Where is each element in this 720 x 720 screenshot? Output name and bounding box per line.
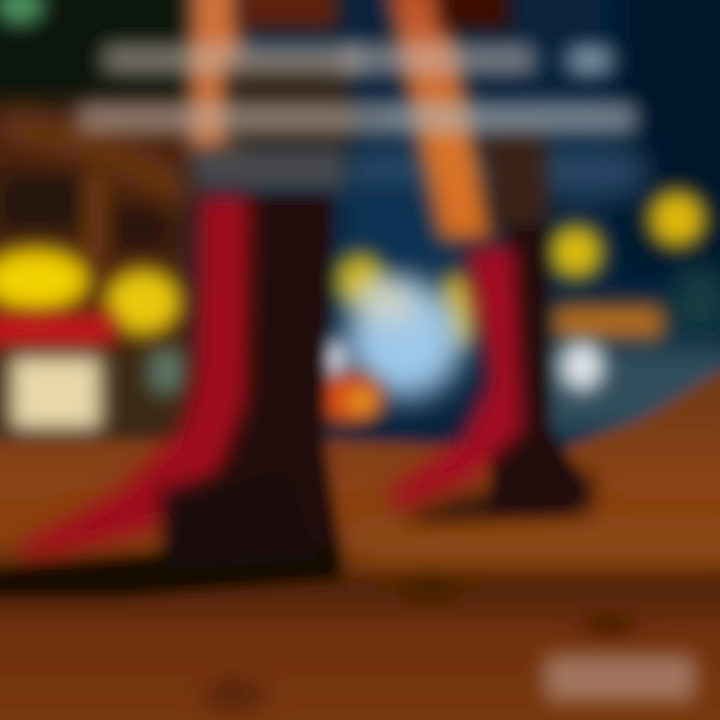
watermark, illegible in the reference	[545, 655, 695, 701]
right leg	[385, 0, 550, 240]
yellow shop sign	[0, 248, 182, 430]
left leg	[190, 0, 350, 190]
building on the left	[0, 105, 195, 450]
right red boot	[385, 225, 592, 522]
street lights	[336, 191, 705, 348]
orange sign and right storefront	[530, 266, 720, 435]
title block, illegible in the reference	[78, 44, 637, 133]
left red boot	[0, 195, 345, 598]
blue and white background glow	[307, 280, 463, 424]
ground	[0, 365, 720, 720]
